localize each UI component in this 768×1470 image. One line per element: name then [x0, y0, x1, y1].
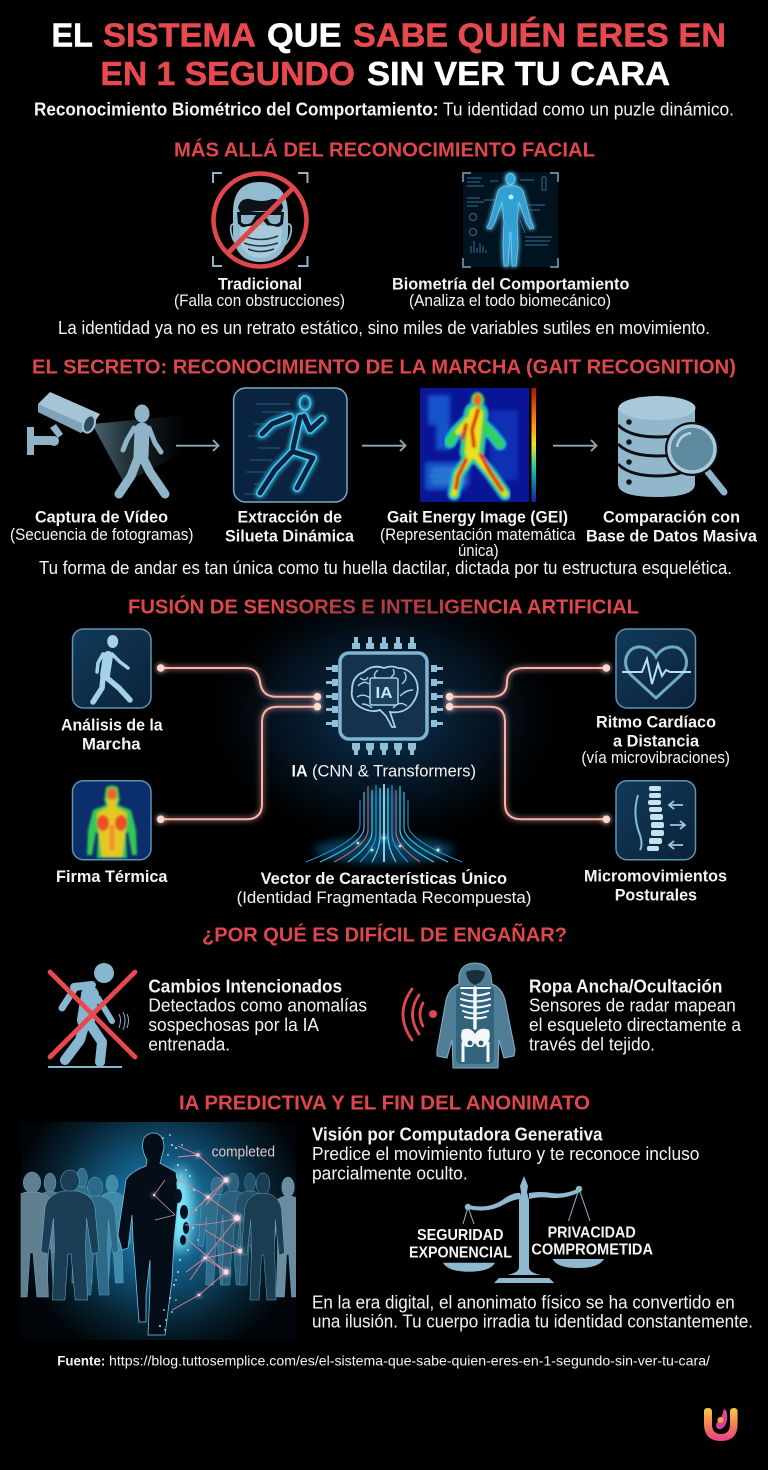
text: conclusión: una ilusión. Tu cuerpo irradia tu identidad constantemente.	[312, 1312, 753, 1332]
tile: spine	[616, 781, 696, 860]
text: identidad: La identidad ya no es un retrato estático, sino miles de variables sutiles en movimiento.	[58, 318, 710, 338]
logo	[704, 1408, 738, 1441]
text: cambios intencionados: Cambios Intencionados	[148, 977, 342, 997]
label: vector de características	[237, 869, 531, 907]
heading: fusión de sensores: FUSIÓN DE SENSORES E INTELIGENCIA ARTIFICIAL	[128, 594, 639, 618]
label: seguridad exponencial: EXPONENCIAL	[409, 1244, 512, 1261]
label: biometría del comportamiento: (Analiza el todo biomecánico)	[409, 291, 611, 310]
source: Fuente:	[57, 1353, 105, 1369]
heading: por qué es difícil de engañar: ¿POR QUÉ ES DIFÍCIL DE ENGAÑAR?	[202, 924, 567, 947]
label: IA CNN & Transformers: (CNN & Transformers)	[312, 762, 476, 781]
label: privacidad comprometida	[531, 1224, 653, 1258]
label: tradicional: (Falla con obstrucciones)	[174, 291, 345, 310]
label: comparación con base de datos	[586, 508, 758, 545]
icon: database with magnifier	[618, 396, 724, 497]
label: análisis de la marcha: Marcha	[82, 734, 141, 753]
label: privacidad comprometida: COMPROMETIDA	[531, 1241, 653, 1258]
panel: gait energy image	[420, 388, 536, 502]
label: ritmo cardíaco: a Distancia	[613, 732, 700, 751]
source: https://blog.tuttosemplice.com/es/el-sistema-que-sabe-quien-eres-en-1-segundo-sin-ver-tu-cara/	[109, 1353, 710, 1369]
title: EL	[52, 17, 93, 54]
label: captura de vídeo	[10, 508, 194, 544]
label: gait energy image: única)	[458, 541, 499, 560]
label: micromovimientos posturales: Micromovimientos	[584, 867, 727, 886]
text: conclusión	[312, 1292, 753, 1332]
label: ritmo cardíaco: Ritmo Cardíaco	[596, 712, 716, 731]
text: ropa ancha: el esqueleto directamente a	[529, 1015, 742, 1035]
label: gait energy image: (Representación matemática	[380, 525, 576, 544]
arrow 3	[553, 440, 596, 451]
image: crowd and fragmented figure: completed	[212, 1144, 275, 1161]
glow behind chip	[194, 575, 574, 855]
label: gait energy image	[380, 508, 576, 560]
label: análisis de la marcha	[61, 716, 163, 753]
tile: walking	[72, 629, 151, 708]
label: ritmo cardíaco: (vía microvibraciones)	[581, 748, 730, 767]
text: cambios intencionados: Detectados como anomalías	[148, 996, 367, 1016]
subtitle	[34, 100, 734, 120]
label: micromovimientos posturales: Posturales	[615, 886, 697, 905]
title: QUE	[267, 17, 342, 54]
icon: body scan	[463, 172, 558, 267]
title: EN 1 SEGUNDO	[100, 55, 355, 92]
chip: IA	[326, 637, 443, 755]
label: IA CNN & Transformers: IA	[292, 762, 308, 781]
label: comparación con base de datos: Comparación con	[603, 508, 740, 527]
text: visión por computadora: Visión por Computadora Generativa	[312, 1125, 603, 1145]
heading: IA predictiva: IA PREDICTIVA Y EL FIN DEL ANONIMATO	[179, 1091, 590, 1114]
title: SABE QUIÉN ERES EN	[353, 17, 726, 54]
label: seguridad exponencial	[409, 1227, 512, 1261]
heading: más allá del reconocimiento facial: MÁS ALLÁ DEL RECONOCIMIENTO FACIAL	[174, 139, 595, 162]
arrow 2	[362, 440, 406, 451]
connector lines	[161, 668, 606, 819]
subtitle: Reconocimiento Biométrico del Comportamiento:	[34, 100, 438, 120]
label: captura de vídeo: (Secuencia de fotogramas)	[10, 525, 194, 544]
label: captura de vídeo: Captura de Vídeo	[35, 508, 168, 527]
label: privacidad comprometida: PRIVACIDAD	[548, 1224, 636, 1241]
text: visión por computadora: Predice el movimiento futuro y te reconoce incluso	[312, 1144, 699, 1164]
text: conclusión: En la era digital, el anonimato físico se ha convertido en	[312, 1292, 735, 1312]
text: cambios intencionados	[148, 977, 367, 1054]
icon: hoodie with skeleton	[437, 963, 515, 1068]
label: tradicional: Tradicional	[218, 274, 302, 294]
heading: el secreto: EL SECRETO: RECONOCIMIENTO DE LA MARCHA (GAIT RECOGNITION)	[32, 356, 736, 378]
title: SISTEMA	[103, 17, 256, 54]
text: cambios intencionados: entrenada.	[148, 1034, 230, 1054]
label: vector de características: Vector de Características Único	[261, 869, 507, 888]
label: análisis de la marcha: Análisis de la	[61, 716, 163, 735]
text: ropa ancha: Sensores de radar mapean	[529, 996, 736, 1016]
title	[52, 17, 726, 92]
label: firma térmica: Firma Térmica	[56, 867, 168, 886]
label: biometría del comportamiento: Biometría del Comportamiento	[392, 274, 629, 294]
graphic: feature vector light stream	[306, 784, 462, 864]
icon: camera and walker	[27, 392, 189, 494]
label: seguridad exponencial: SEGURIDAD	[417, 1227, 504, 1244]
label: gait energy image: Gait Energy Image (GEI)	[387, 508, 568, 527]
text: ropa ancha: través del tejido.	[529, 1034, 655, 1054]
text: visión por computadora: parcialmente oculto.	[312, 1163, 468, 1183]
text: cambios intencionados: sospechosas por la IA	[148, 1015, 319, 1035]
panel: dynamic silhouette	[234, 388, 347, 502]
text: ropa ancha: Ropa Ancha/Ocultación	[529, 977, 722, 997]
label: extracción de silueta: Extracción de	[238, 508, 342, 527]
icon: balance scale	[443, 1176, 604, 1283]
label: comparación con base de datos: Base de Datos Masiva	[586, 526, 758, 545]
label: biometría del comportamiento	[392, 274, 629, 310]
subtitle: Tu identidad como un puzle dinámico.	[443, 100, 734, 120]
label: ritmo cardíaco	[581, 712, 730, 767]
label: vector de características: (Identidad Fragmentada Recompuesta)	[237, 888, 531, 907]
tile: heart rate	[616, 629, 696, 708]
text: visión por computadora	[312, 1125, 699, 1183]
connector nodes	[157, 664, 610, 823]
tile: thermal body	[72, 781, 151, 860]
label: extracción de silueta	[225, 508, 355, 545]
text: huella dactilar: Tu forma de andar es tan única como tu huella dactilar, dictada por tu estructura esquelética.	[39, 558, 732, 578]
icon: masked face crossed out	[213, 173, 308, 266]
text: ropa ancha	[529, 977, 742, 1054]
icon: crossed walking person	[48, 963, 135, 1067]
image: crowd and fragmented figure	[5, 1122, 308, 1340]
title: SIN VER TU CARA	[367, 55, 670, 92]
label: extracción de silueta: Silueta Dinámica	[225, 526, 355, 545]
chip: IA: IA	[376, 685, 393, 702]
label: tradicional	[174, 274, 345, 310]
arrow 1	[176, 440, 218, 451]
label: micromovimientos posturales	[584, 867, 727, 905]
icon: radar signal	[403, 989, 437, 1040]
